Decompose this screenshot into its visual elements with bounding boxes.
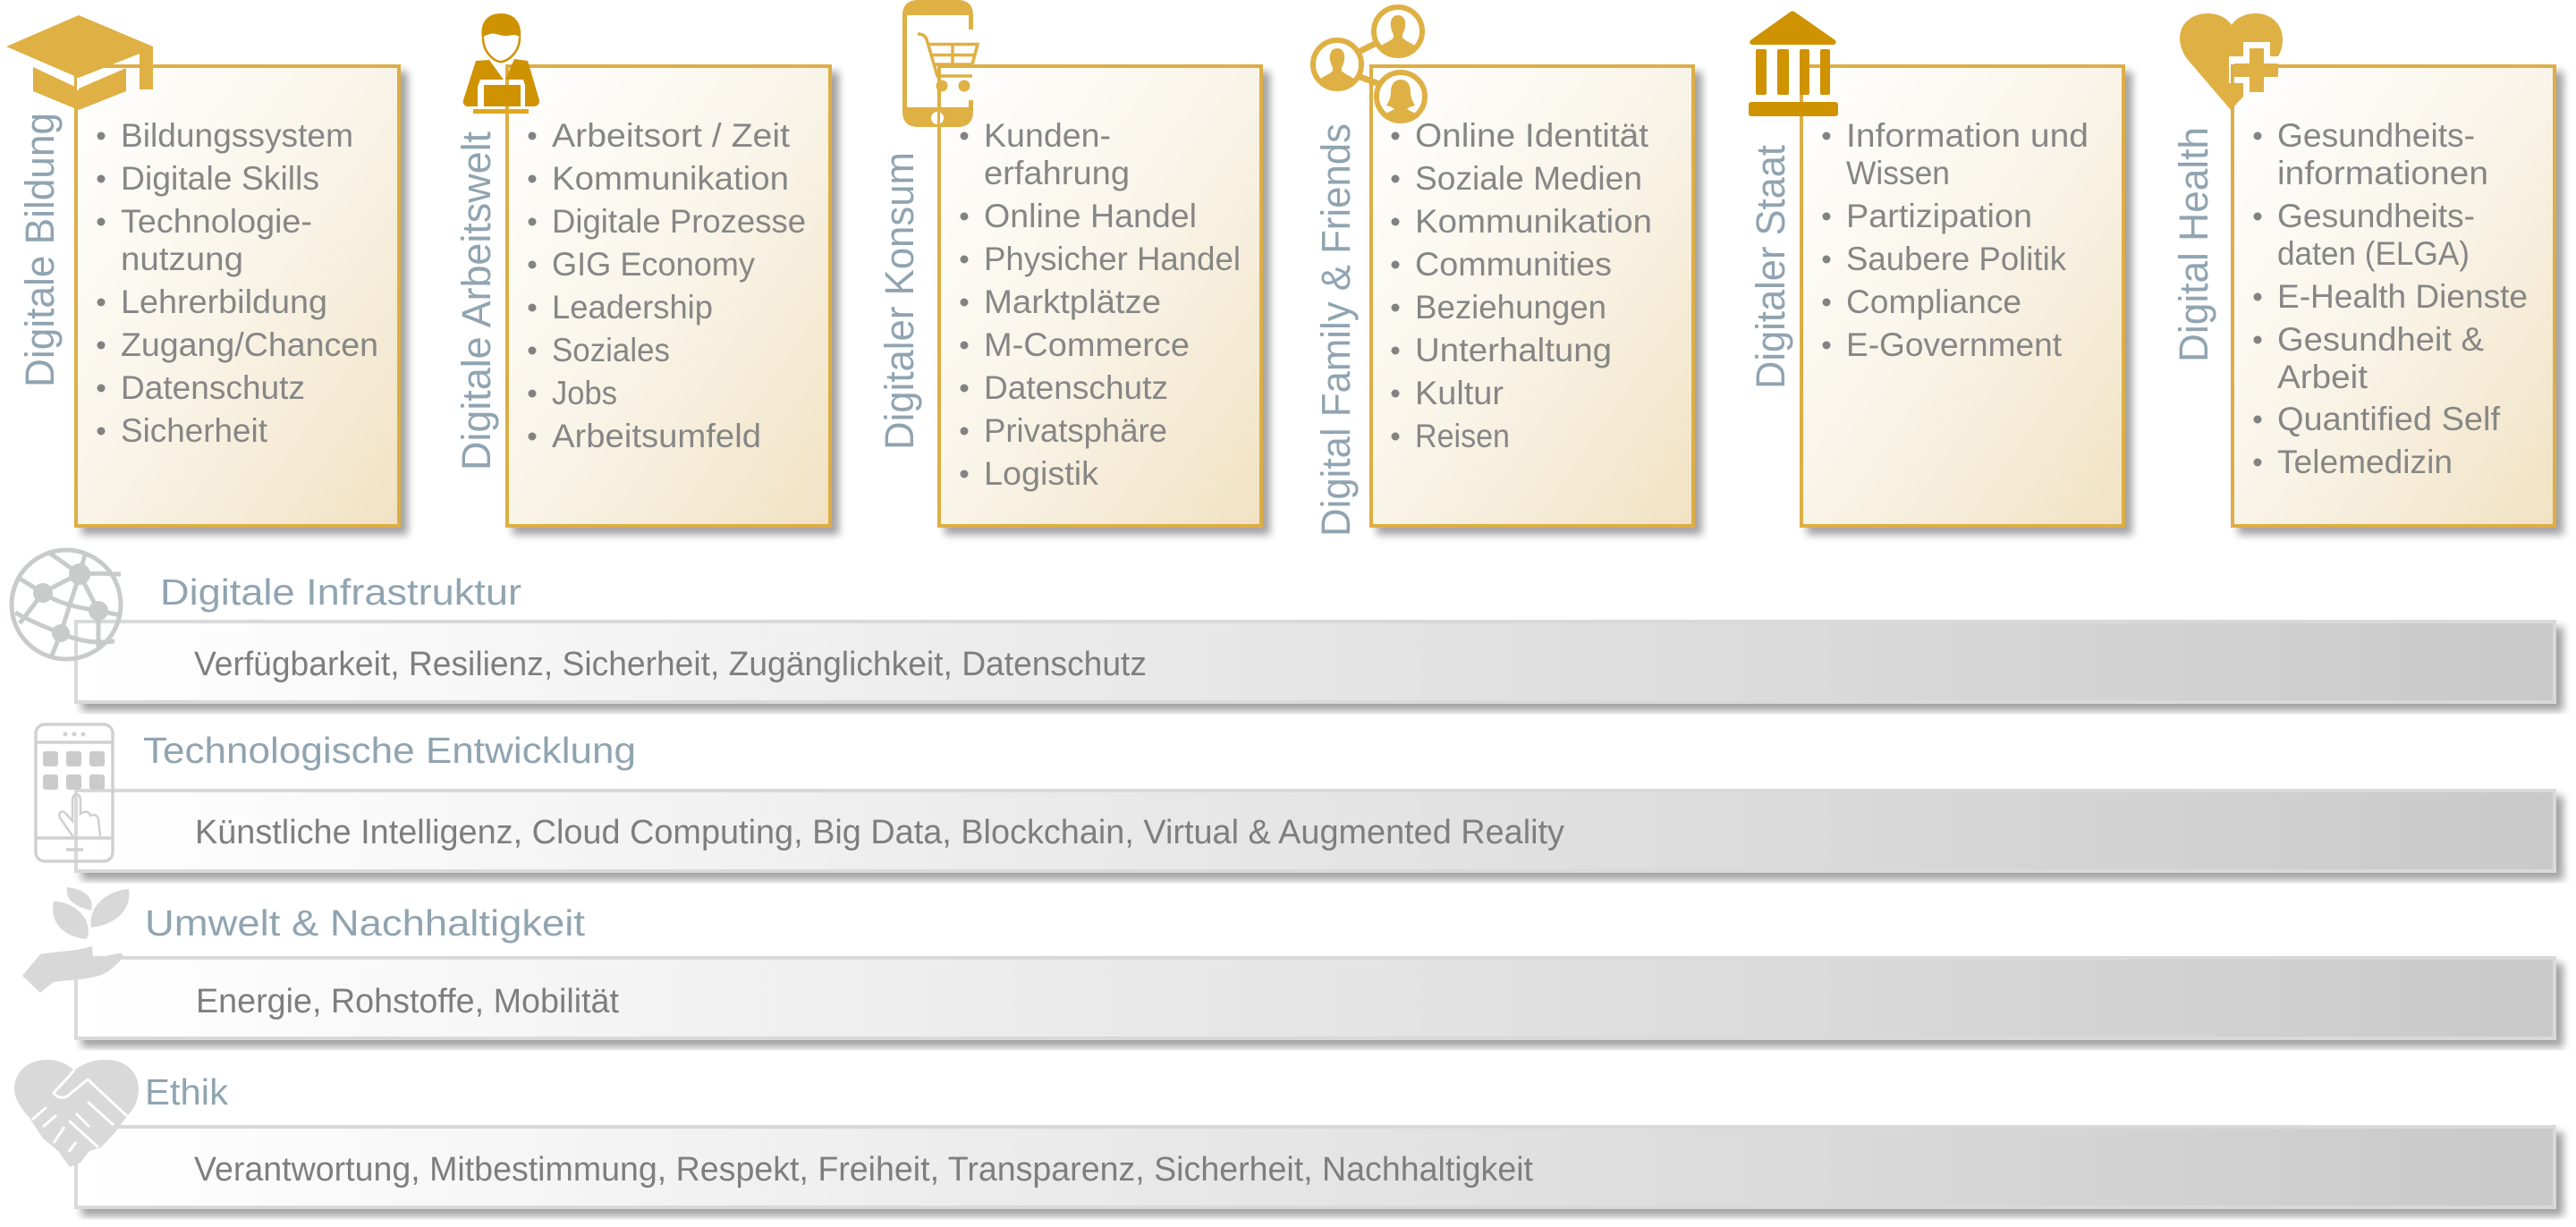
list: Digitale Bildung: Digitale Skills: [121, 160, 319, 197]
icon: hand with leaves: [22, 887, 129, 993]
list: Digital Family & Friends: Kommunikation: [1415, 203, 1652, 240]
icon: connected people: [1313, 7, 1425, 123]
heading: Digital Health: Digital Health: [2171, 127, 2216, 362]
list: Digital Health: Quantified Self: [2277, 401, 2501, 437]
list: Digital Family & Friends: Unterhaltung: [1415, 332, 1612, 368]
heading: Digitaler Staat: Digitaler Staat: [1748, 145, 1793, 389]
panel: Digital Health: [2171, 13, 2555, 526]
list: Digitaler Staat: Wissen: [1846, 155, 1950, 191]
list: Digitaler Staat: E-Government: [1846, 326, 2063, 363]
list: Digitale Bildung: [97, 117, 378, 449]
list: Digitaler Staat: Compliance: [1846, 283, 2021, 320]
list: Digitale Arbeitswelt: GIG Economy: [552, 246, 755, 283]
panel: Umwelt & Nachhaltigkeit: [22, 887, 2555, 1038]
list: Digital Family & Friends: [1392, 117, 1652, 454]
heading: Digitale Bildung: Digitale Bildung: [17, 113, 63, 387]
icon: heart with handshake: [14, 1060, 139, 1167]
icon: graduation cap: [6, 15, 153, 110]
text: Ethik topics: Verantwortung, Mitbestimmung, Respekt, Freiheit, Transparenz, Sicherheit, Nachhaltigkeit: [194, 1151, 1533, 1189]
list: Digitale Arbeitswelt: [528, 117, 806, 454]
list: Digital Family & Friends: Reisen: [1415, 418, 1510, 454]
icon: smartphone with shopping cart: [902, 0, 978, 127]
heading: Umwelt & Nachhaltigkeit: Umwelt & Nachhaltigkeit: [145, 902, 586, 944]
list: Digitale Arbeitswelt: Jobs: [552, 375, 617, 411]
list: Digital Health: [2254, 117, 2528, 480]
list: Digitaler Konsum: Logistik: [984, 455, 1099, 492]
list: Digital Health: Arbeit: [2277, 359, 2368, 395]
panel: Digitale Bildung: [6, 15, 399, 526]
list: Digitaler Konsum: Kunden-: [984, 117, 1111, 154]
list: Digital Health: Gesundheit &: [2277, 321, 2484, 358]
panel: Ethik: [14, 1060, 2555, 1207]
heading: Ethik: Ethik: [145, 1071, 229, 1113]
heading: Digitale Infrastruktur: Digitale Infrastruktur: [160, 571, 521, 613]
text: Umwelt & Nachhaltigkeit topics: Energie, Rohstoffe, Mobilität: [196, 983, 619, 1020]
list: Digitaler Konsum: Physicher Handel: [984, 241, 1241, 277]
list: Digitale Arbeitswelt: Leadership: [552, 289, 713, 326]
icon: heart with medical cross: [2180, 13, 2283, 110]
list: Digitale Bildung: Sicherheit: [121, 412, 268, 449]
list: Digitaler Konsum: [961, 117, 1241, 492]
list: Digital Health: informationen: [2277, 155, 2488, 191]
list: Digital Health: Gesundheits-: [2277, 198, 2475, 234]
list: Digitale Arbeitswelt: Soziales: [552, 332, 670, 368]
list: Digital Health: Gesundheits-: [2277, 117, 2475, 154]
panel: Digital Family & Friends: [1313, 7, 1693, 537]
list: Digital Family & Friends: Kultur: [1415, 375, 1504, 411]
list: Digital Family & Friends: Communities: [1415, 246, 1612, 283]
list: Digitale Bildung: Lehrerbildung: [121, 283, 327, 320]
text: Digitale Infrastruktur topics: Verfügbarkeit, Resilienz, Sicherheit, Zugänglichkeit, Datenschutz: [194, 646, 1147, 683]
panel: Digitaler Staat: [1748, 11, 2123, 526]
icon: network globe: [12, 550, 121, 659]
list: Digital Family & Friends: Online Identität: [1415, 117, 1649, 154]
list: Digitale Bildung: Zugang/Chancen: [121, 326, 378, 363]
list: Digitaler Staat: Partizipation: [1846, 198, 2032, 234]
list: Digitale Arbeitswelt: Arbeitsumfeld: [552, 418, 761, 454]
list: Digital Family & Friends: Beziehungen: [1415, 289, 1606, 326]
list: Digitale Arbeitswelt: Digitale Prozesse: [552, 203, 806, 240]
list: Digital Health: E-Health Dienste: [2277, 278, 2528, 315]
list: Digitale Arbeitswelt: Arbeitsort / Zeit: [552, 117, 791, 154]
list: Digitale Arbeitswelt: Kommunikation: [552, 160, 789, 197]
icon: office worker: [463, 13, 539, 114]
list: Digitale Bildung: Bildungssystem: [121, 117, 353, 154]
heading: Digitale Arbeitswelt: Digitale Arbeitswelt: [453, 131, 499, 470]
panel: Digitaler Konsum: [877, 0, 1261, 526]
heading: Technologische Entwicklung: Technologische Entwicklung: [143, 730, 636, 771]
list: Digital Health: Telemedizin: [2277, 444, 2453, 480]
list: Digitaler Konsum: Marktplätze: [984, 283, 1161, 320]
icon: government building: [1749, 11, 1838, 116]
panel: Technologische Entwicklung: [36, 724, 2555, 871]
icon: tablet with tapping hand: [36, 724, 113, 861]
list: Digitaler Konsum: Online Handel: [984, 198, 1197, 234]
panel: Digitale Infrastruktur: [12, 550, 2555, 702]
list: Digitaler Staat: Information und: [1846, 117, 2089, 154]
panel: Digitale Arbeitswelt: [453, 13, 830, 526]
list: Digitaler Staat: [1823, 117, 2089, 363]
list: Digitaler Staat: Saubere Politik: [1846, 241, 2066, 277]
list: Digital Family & Friends: Soziale Medien: [1415, 160, 1642, 197]
text: Technologische Entwicklung topics: Künstliche Intelligenz, Cloud Computing, Big Data, Blockchain, Virtual & Augmented Reality: [195, 814, 1564, 851]
list: Digital Health: daten (ELGA): [2277, 235, 2470, 272]
list: Digitale Bildung: Datenschutz: [121, 369, 305, 406]
list: Digitale Bildung: nutzung: [121, 241, 243, 277]
heading: Digitaler Konsum: Digitaler Konsum: [877, 152, 922, 450]
heading: Digital Family & Friends: Digital Family & Friends: [1313, 123, 1359, 537]
list: Digitaler Konsum: Privatsphäre: [984, 412, 1167, 449]
list: Digitaler Konsum: M-Commerce: [984, 326, 1190, 363]
list: Digitaler Konsum: Datenschutz: [984, 369, 1168, 406]
list: Digitale Bildung: Technologie-: [121, 203, 312, 240]
list: Digitaler Konsum: erfahrung: [984, 155, 1130, 191]
